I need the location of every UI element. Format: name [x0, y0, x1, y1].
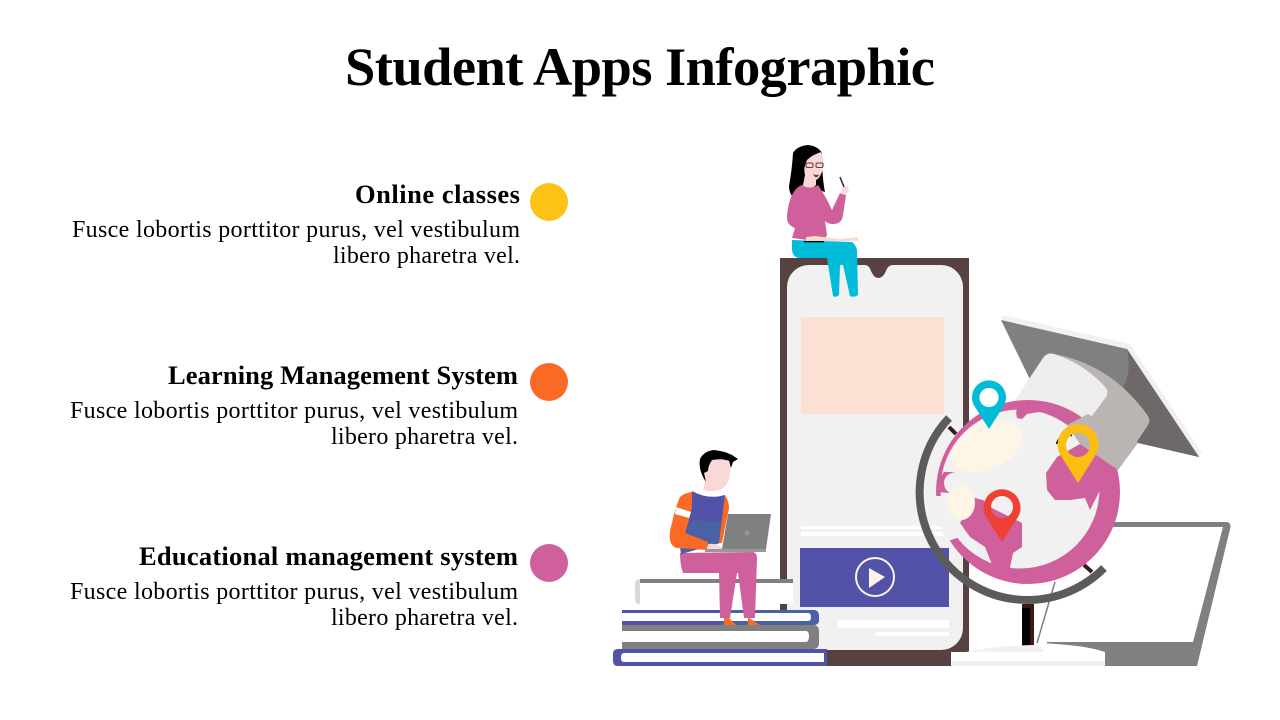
text: educational management description: libero pharetra vel.: [331, 605, 518, 631]
text: educational management description: Fusce lobortis porttitor purus, vel vestibulum: [70, 579, 518, 605]
icon: globe: [934, 400, 1120, 584]
item: learning management system: [70, 360, 568, 450]
marker: yellow dot: [530, 183, 568, 221]
text: online classes description: [72, 217, 520, 269]
title: Student Apps Infographic: [345, 36, 935, 97]
phone video thumbnail: [801, 317, 944, 414]
item: online classes: [72, 179, 568, 269]
marker: orange dot: [530, 363, 568, 401]
icon: laptop behind globe: [1037, 522, 1230, 666]
icon: globe stand: [920, 418, 1105, 666]
heading: educational management system: Educational management system: [139, 541, 518, 571]
illustration: students, phone, globe: [613, 145, 1230, 666]
text: online classes description: libero pharetra vel.: [333, 243, 520, 269]
text: online classes description: Fusce lobortis porttitor purus, vel vestibulum: [72, 217, 520, 243]
heading: learning management system: Learning Management System: [168, 360, 518, 390]
figure: girl reading on phone: [787, 145, 858, 297]
heading: online classes: Online classes: [355, 179, 520, 209]
item: educational management system: [70, 541, 568, 631]
figure: boy with laptop: [670, 450, 771, 625]
inner blue pin hole: [980, 388, 998, 407]
text: learning management description: Fusce lobortis porttitor purus, vel vestibulum: [70, 398, 518, 424]
globe cream land: [943, 409, 1031, 520]
marker: pink dot: [530, 544, 568, 582]
globe continents: [937, 408, 1110, 568]
icon: red map pin: [983, 489, 1020, 542]
cap body overlapping globe: [1067, 414, 1138, 470]
text: learning management description: libero pharetra vel.: [331, 424, 518, 450]
icon: graduation cap: [1001, 315, 1202, 470]
icon: blue map pin: [972, 380, 1006, 429]
text: educational management description: [70, 579, 518, 631]
icon: yellow map pin: [1058, 424, 1098, 483]
icon: phone: [780, 258, 969, 666]
icon: stack of books: [613, 579, 827, 666]
phone text lines: [801, 526, 949, 636]
phone video player: [800, 548, 949, 607]
text: learning management description: [70, 398, 518, 450]
